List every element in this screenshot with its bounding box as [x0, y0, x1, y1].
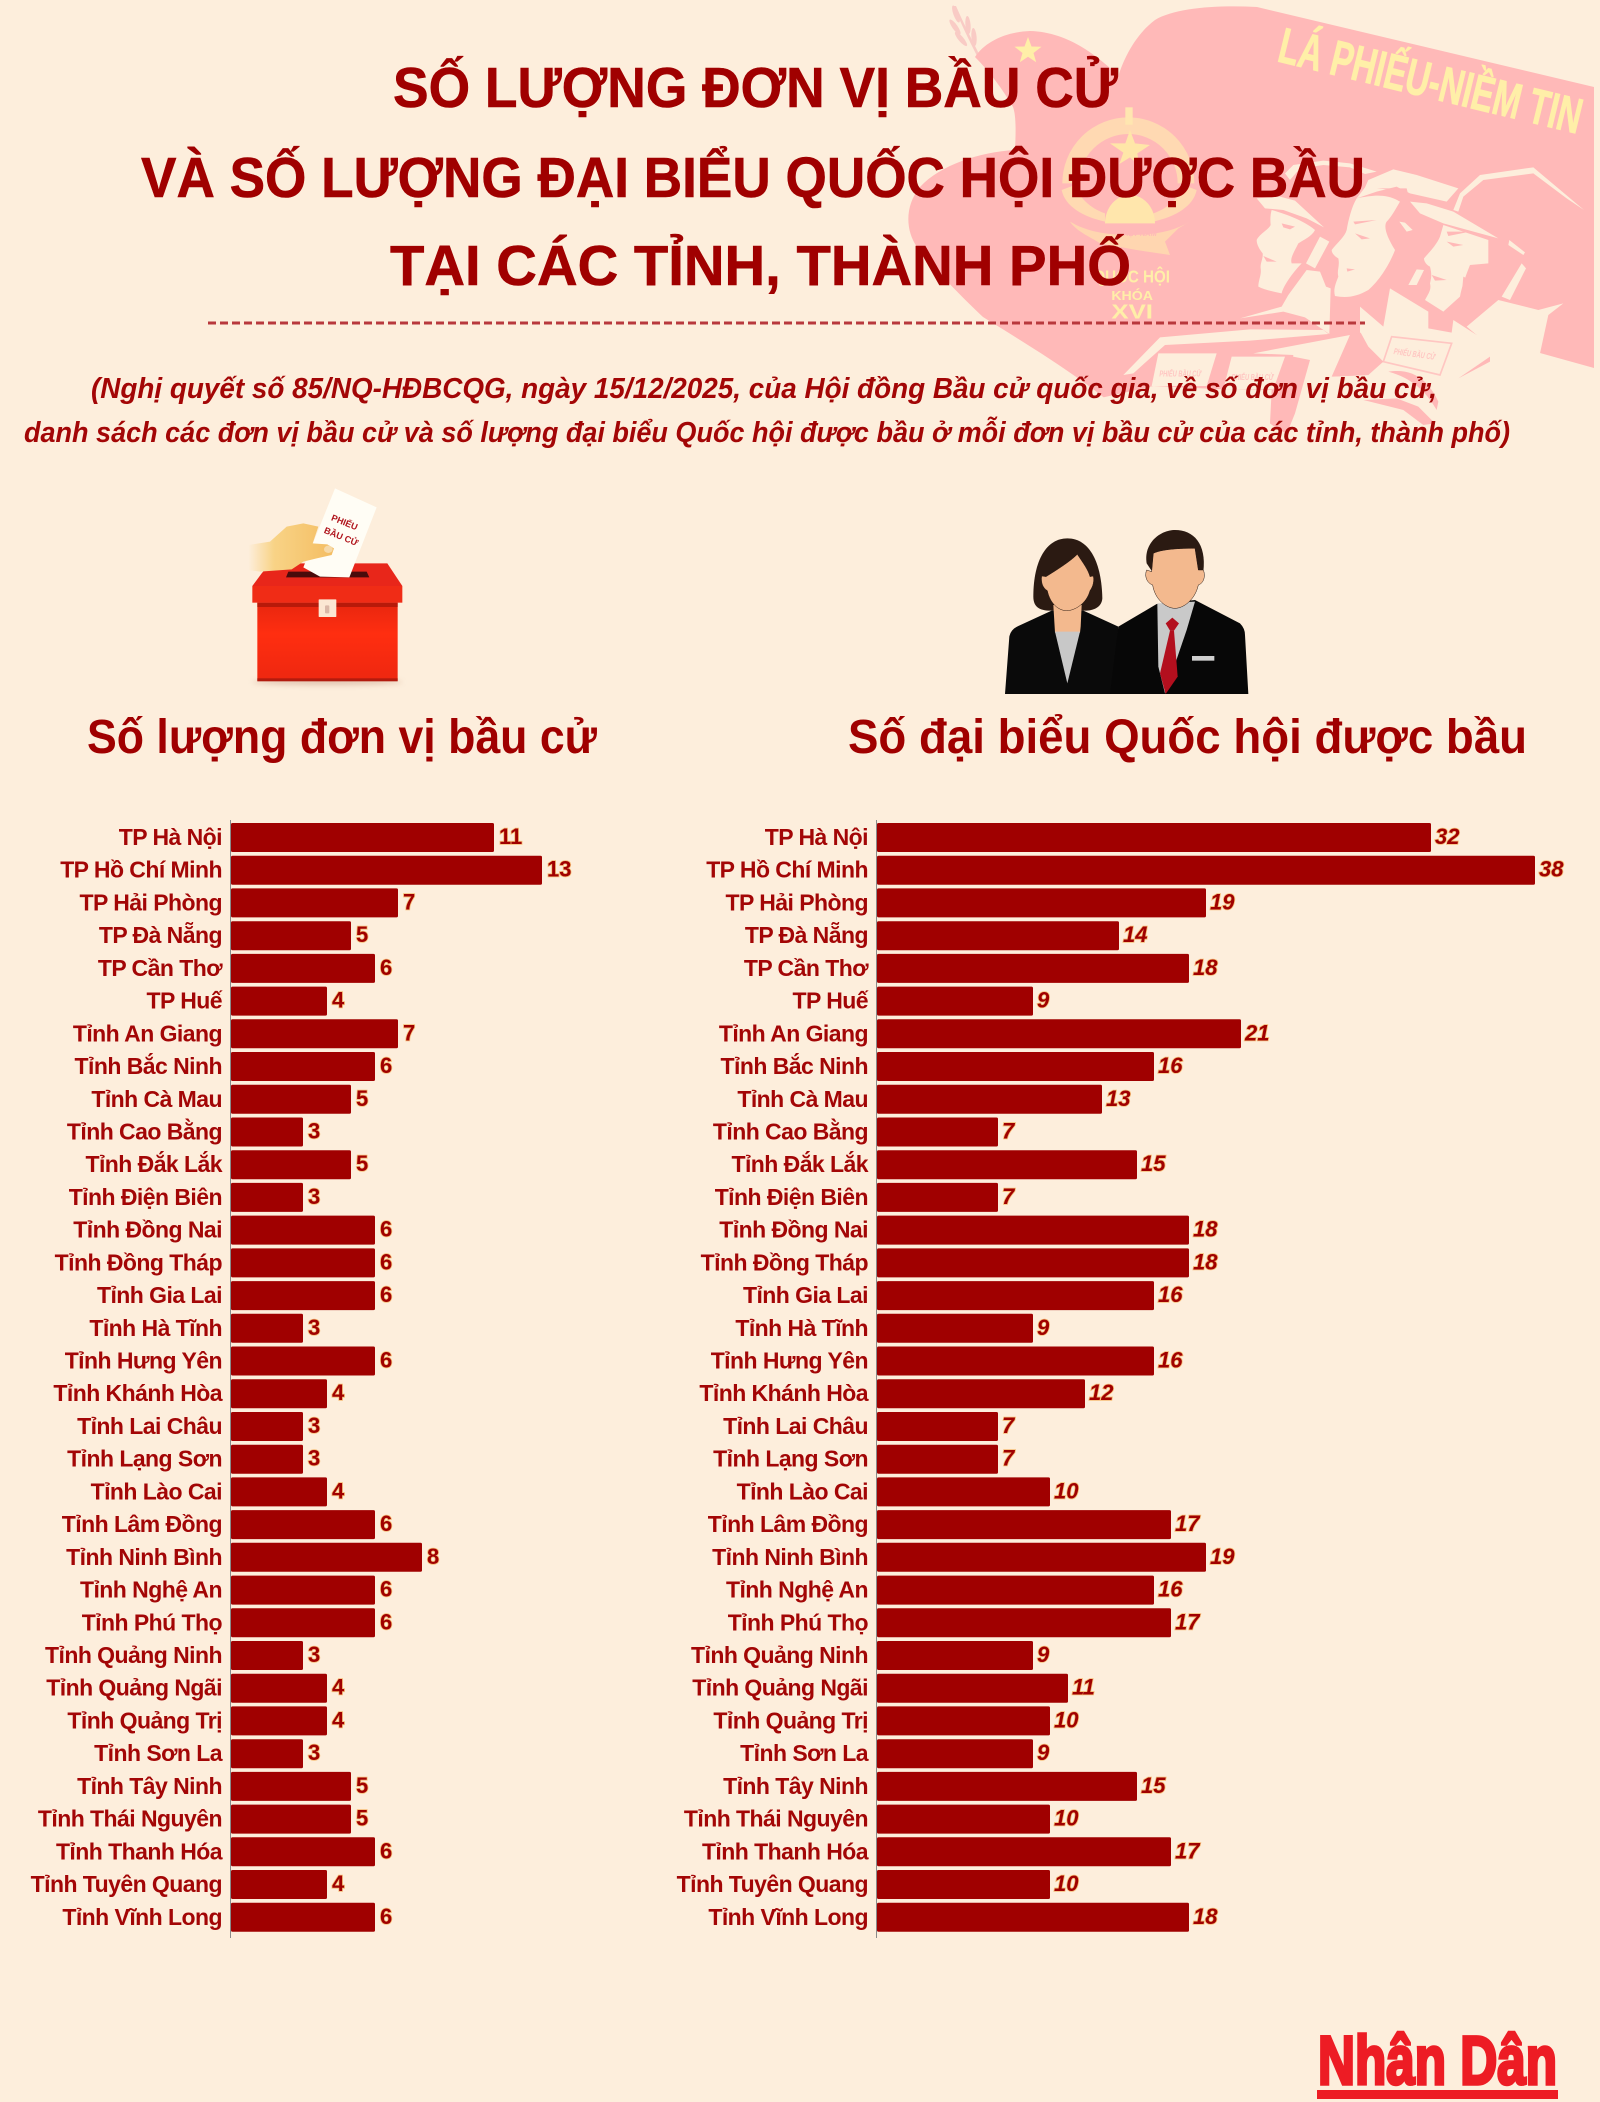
- row Tỉnh Tuyên Quang: Tỉnh Tuyên Quang: [31, 1871, 222, 1897]
- row Tỉnh Đồng Tháp: Tỉnh Đồng Tháp: [55, 1249, 222, 1275]
- row Tỉnh Đồng Tháp: Tỉnh Đồng Tháp: [701, 1249, 868, 1275]
- row Tỉnh Sơn La: Tỉnh Sơn La: [740, 1740, 869, 1766]
- row Tỉnh Nghệ An: Tỉnh Nghệ An: [80, 1577, 222, 1603]
- row Tỉnh Hưng Yên: 16: [1158, 1348, 1183, 1372]
- row Tỉnh Nghệ An: Tỉnh Nghệ An: [726, 1577, 868, 1603]
- row Tỉnh Lạng Sơn: [67, 1445, 320, 1474]
- row Tỉnh Quảng Ngãi: Tỉnh Quảng Ngãi: [46, 1675, 222, 1701]
- row Tỉnh Cà Mau: 13: [1106, 1086, 1130, 1111]
- row Tỉnh Nghệ An: [80, 1576, 392, 1605]
- row Tỉnh Ninh Bình: Tỉnh Ninh Bình: [66, 1544, 222, 1570]
- row Tỉnh Đồng Tháp: [55, 1248, 392, 1277]
- row Tỉnh Lạng Sơn: [713, 1445, 1016, 1474]
- row TP Huế: [792, 987, 1050, 1016]
- national emblem: [1062, 107, 1197, 323]
- row Tỉnh Lạng Sơn: Tỉnh Lạng Sơn: [713, 1446, 868, 1472]
- row TP Hải Phòng: TP Hải Phòng: [80, 889, 222, 915]
- row Tỉnh Đắk Lắk: [85, 1150, 368, 1179]
- row Tỉnh Nghệ An: 6: [380, 1577, 392, 1602]
- row Tỉnh Đồng Tháp: [701, 1248, 1218, 1277]
- row TP Hải Phòng: [726, 888, 1235, 917]
- row Tỉnh Lâm Đồng: 17: [1175, 1511, 1201, 1536]
- raised arms and ballots: PHIẾU BẦU CỬ: [1159, 369, 1202, 379]
- raised arms and ballots: [1103, 329, 1458, 463]
- row Tỉnh Tuyên Quang: [677, 1870, 1079, 1899]
- row Tỉnh Sơn La: [740, 1739, 1050, 1768]
- row TP Cần Thơ: 6: [380, 955, 392, 980]
- row Tỉnh Thanh Hóa: [56, 1837, 392, 1866]
- row Tỉnh Cà Mau: [737, 1085, 1130, 1114]
- row TP Hà Nội: 32: [1435, 824, 1460, 849]
- row Tỉnh Cao Bằng: 3: [308, 1118, 320, 1144]
- row Tỉnh Thanh Hóa: 17: [1175, 1838, 1201, 1863]
- row Tỉnh Bắc Ninh: 6: [380, 1053, 392, 1078]
- row Tỉnh Sơn La: 9: [1037, 1740, 1050, 1765]
- row Tỉnh Lâm Đồng: Tỉnh Lâm Đồng: [708, 1511, 868, 1537]
- voter three: [1410, 167, 1584, 312]
- row Tỉnh Vĩnh Long: 18: [1193, 1904, 1218, 1929]
- row Tỉnh Phú Thọ: Tỉnh Phú Thọ: [728, 1609, 868, 1635]
- title: [141, 55, 1365, 298]
- row Tỉnh Tây Ninh: [77, 1772, 368, 1801]
- wheat sprig: [948, 5, 979, 56]
- row Tỉnh Quảng Ngãi: 4: [332, 1675, 345, 1700]
- voter bodies: [1360, 288, 1593, 387]
- national emblem: QUỐC HỘI: [1093, 267, 1170, 287]
- row Tỉnh Thái Nguyên: [38, 1805, 368, 1834]
- row Tỉnh Cao Bằng: Tỉnh Cao Bằng: [67, 1118, 222, 1144]
- row Tỉnh Thái Nguyên: [684, 1805, 1079, 1834]
- row Tỉnh Quảng Ninh: 9: [1037, 1642, 1050, 1667]
- row Tỉnh An Giang: Tỉnh An Giang: [73, 1020, 222, 1046]
- row Tỉnh Bắc Ninh: 16: [1158, 1053, 1183, 1078]
- row Tỉnh Tây Ninh: 5: [356, 1773, 368, 1798]
- subtitle: (Nghị quyết số 85/NQ-HĐBCQG, ngày 15/12/2025, của Hội đồng Bầu cử quốc gia, về số đơn vị bầu cử,: [91, 373, 1437, 405]
- row Tỉnh Đồng Nai: [73, 1216, 392, 1245]
- row Tỉnh Quảng Ngãi: 11: [1072, 1675, 1095, 1700]
- row Tỉnh Cà Mau: [91, 1085, 368, 1114]
- subtitle: danh sách các đơn vị bầu cử và số lượng đại biểu Quốc hội được bầu ở mỗi đơn vị bầu cử của các tỉnh, thành phố): [24, 415, 1510, 449]
- row Tỉnh Lào Cai: Tỉnh Lào Cai: [737, 1478, 868, 1504]
- row TP Hải Phòng: 7: [403, 889, 415, 914]
- row Tỉnh Hưng Yên: [711, 1346, 1183, 1376]
- row Tỉnh Khánh Hòa: 4: [332, 1380, 345, 1405]
- row Tỉnh Gia Lai: Tỉnh Gia Lai: [743, 1282, 868, 1308]
- row Tỉnh Bắc Ninh: [75, 1052, 392, 1081]
- row Tỉnh Sơn La: [94, 1739, 320, 1768]
- row Tỉnh Quảng Ngãi: [692, 1674, 1095, 1703]
- row Tỉnh Tuyên Quang: 4: [332, 1871, 345, 1896]
- row Tỉnh Phú Thọ: 6: [380, 1609, 392, 1634]
- row TP Đà Nẵng: TP Đà Nẵng: [99, 921, 222, 948]
- row TP Hà Nội: 11: [499, 824, 522, 849]
- row Tỉnh Gia Lai: [97, 1281, 392, 1310]
- row Tỉnh Điện Biên: 3: [308, 1184, 320, 1209]
- row TP Hải Phòng: [80, 888, 415, 917]
- row Tỉnh Ninh Bình: 19: [1210, 1544, 1235, 1569]
- voter two: [1332, 169, 1458, 297]
- row Tỉnh Gia Lai: 6: [380, 1282, 392, 1307]
- row Tỉnh Đắk Lắk: Tỉnh Đắk Lắk: [85, 1150, 223, 1177]
- row TP Huế: TP Huế: [792, 988, 869, 1014]
- row Tỉnh Đồng Nai: Tỉnh Đồng Nai: [719, 1217, 868, 1243]
- row Tỉnh Lai Châu: 7: [1002, 1413, 1016, 1438]
- row Tỉnh Tuyên Quang: 10: [1054, 1871, 1079, 1896]
- row Tỉnh Nghệ An: [726, 1576, 1183, 1605]
- row Tỉnh Quảng Trị: [67, 1706, 345, 1735]
- row TP Đà Nẵng: TP Đà Nẵng: [745, 921, 868, 948]
- row Tỉnh Tây Ninh: [723, 1772, 1166, 1801]
- row Tỉnh Đắk Lắk: 15: [1141, 1151, 1166, 1176]
- row Tỉnh Bắc Ninh: Tỉnh Bắc Ninh: [721, 1052, 868, 1079]
- row Tỉnh Lạng Sơn: 3: [308, 1446, 320, 1471]
- row TP Đà Nẵng: [745, 921, 1147, 950]
- row TP Hồ Chí Minh: 38: [1539, 857, 1564, 882]
- row Tỉnh Hưng Yên: [65, 1346, 392, 1376]
- row Tỉnh Hưng Yên: 6: [380, 1348, 392, 1372]
- row Tỉnh Gia Lai: [743, 1281, 1183, 1310]
- row Tỉnh Bắc Ninh: [721, 1052, 1183, 1081]
- row Tỉnh Bắc Ninh: Tỉnh Bắc Ninh: [75, 1052, 222, 1079]
- row TP Hà Nội: [765, 823, 1460, 852]
- row Tỉnh Hà Tĩnh: Tỉnh Hà Tĩnh: [735, 1315, 868, 1341]
- pink hand stripes: [1333, 333, 1490, 425]
- row Tỉnh Lào Cai: Tỉnh Lào Cai: [91, 1478, 222, 1504]
- row TP Hồ Chí Minh: TP Hồ Chí Minh: [60, 857, 222, 883]
- row Tỉnh Tây Ninh: 15: [1141, 1773, 1166, 1798]
- row Tỉnh Điện Biên: Tỉnh Điện Biên: [715, 1184, 868, 1210]
- row Tỉnh Phú Thọ: Tỉnh Phú Thọ: [82, 1609, 222, 1635]
- row TP Hà Nội: TP Hà Nội: [765, 824, 868, 850]
- row Tỉnh Quảng Trị: Tỉnh Quảng Trị: [713, 1707, 868, 1733]
- row Tỉnh Lâm Đồng: 6: [380, 1511, 392, 1536]
- banner illustration: dove, flag and three voters: [908, 5, 1594, 463]
- icon: ballot box: [248, 488, 402, 685]
- row TP Cần Thơ: TP Cần Thơ: [744, 955, 869, 981]
- row TP Hà Nội: TP Hà Nội: [119, 824, 222, 850]
- row Tỉnh Tuyên Quang: Tỉnh Tuyên Quang: [677, 1871, 868, 1897]
- row Tỉnh Quảng Ninh: Tỉnh Quảng Ninh: [45, 1642, 222, 1668]
- voters: [1240, 161, 1593, 387]
- row Tỉnh Quảng Trị: 4: [332, 1707, 345, 1732]
- row TP Hải Phòng: TP Hải Phòng: [726, 889, 868, 915]
- row Tỉnh Thanh Hóa: Tỉnh Thanh Hóa: [702, 1838, 869, 1864]
- row Tỉnh Đồng Nai: [719, 1216, 1218, 1245]
- row Tỉnh Thái Nguyên: 10: [1054, 1806, 1079, 1831]
- row Tỉnh Quảng Ninh: Tỉnh Quảng Ninh: [691, 1642, 868, 1668]
- row Tỉnh Nghệ An: 16: [1158, 1577, 1183, 1602]
- row Tỉnh Quảng Ngãi: Tỉnh Quảng Ngãi: [692, 1675, 868, 1701]
- row Tỉnh Lai Châu: [723, 1412, 1016, 1441]
- row Tỉnh Đắk Lắk: Tỉnh Đắk Lắk: [731, 1150, 869, 1177]
- national emblem: XVI: [1111, 300, 1153, 323]
- national emblem: KHÓA: [1111, 288, 1153, 303]
- row Tỉnh Tây Ninh: Tỉnh Tây Ninh: [723, 1773, 868, 1799]
- row TP Huế: 4: [332, 988, 345, 1013]
- row Tỉnh Sơn La: 3: [308, 1740, 320, 1765]
- row Tỉnh Ninh Bình: Tỉnh Ninh Bình: [712, 1544, 868, 1570]
- chest ballot: [1383, 337, 1452, 375]
- dove and flag shape: [908, 6, 1594, 436]
- row Tỉnh Vĩnh Long: 6: [380, 1904, 392, 1929]
- row Tỉnh Quảng Trị: 10: [1054, 1707, 1079, 1732]
- row TP Cần Thơ: [744, 954, 1218, 983]
- row Tỉnh Vĩnh Long: [62, 1903, 392, 1932]
- row Tỉnh Quảng Ninh: [45, 1641, 320, 1670]
- row TP Huế: TP Huế: [146, 988, 223, 1014]
- row Tỉnh Hưng Yên: Tỉnh Hưng Yên: [65, 1348, 222, 1374]
- icon: ballot box: PHIẾU: [330, 513, 359, 532]
- row Tỉnh Lai Châu: [77, 1412, 320, 1441]
- star on dove: [1014, 37, 1042, 62]
- row Tỉnh Khánh Hòa: [53, 1379, 345, 1408]
- row Tỉnh Đắk Lắk: 5: [356, 1151, 368, 1176]
- row Tỉnh An Giang: 21: [1244, 1020, 1269, 1045]
- row Tỉnh Hà Tĩnh: [735, 1314, 1050, 1343]
- row Tỉnh Đồng Nai: 6: [380, 1217, 392, 1242]
- row Tỉnh Cà Mau: Tỉnh Cà Mau: [737, 1086, 868, 1112]
- row TP Đà Nẵng: 5: [356, 922, 368, 947]
- row Tỉnh Khánh Hòa: Tỉnh Khánh Hòa: [699, 1380, 869, 1406]
- title: VÀ SỐ LƯỢNG ĐẠI BIỂU QUỐC HỘI ĐƯỢC BẦU: [141, 145, 1365, 210]
- row TP Cần Thơ: TP Cần Thơ: [98, 955, 223, 981]
- row Tỉnh Quảng Ngãi: [46, 1674, 345, 1703]
- row Tỉnh Lai Châu: 3: [308, 1413, 320, 1438]
- row Tỉnh Phú Thọ: [728, 1608, 1201, 1637]
- row Tỉnh Thanh Hóa: 6: [380, 1838, 392, 1863]
- row Tỉnh Quảng Ninh: [691, 1641, 1050, 1670]
- row Tỉnh Quảng Trị: Tỉnh Quảng Trị: [67, 1707, 222, 1733]
- row Tỉnh Cao Bằng: [67, 1118, 320, 1146]
- row Tỉnh Điện Biên: [715, 1183, 1016, 1212]
- row Tỉnh Khánh Hòa: Tỉnh Khánh Hòa: [53, 1380, 223, 1406]
- row Tỉnh Đồng Nai: 18: [1193, 1217, 1218, 1242]
- row Tỉnh Lâm Đồng: [708, 1510, 1201, 1539]
- row TP Huế: [146, 987, 345, 1016]
- heading: số lượng đơn vị bầu cử: Số lượng đơn vị bầu cử: [87, 711, 597, 764]
- row Tỉnh Quảng Ninh: 3: [308, 1642, 320, 1667]
- raised arms and ballots: PHIẾU BẦU CỬ: [1232, 372, 1274, 382]
- row Tỉnh Lào Cai: 4: [332, 1478, 345, 1503]
- title: SỐ LƯỢNG ĐƠN VỊ BẦU CỬ: [393, 55, 1119, 120]
- row Tỉnh Khánh Hòa: 12: [1089, 1380, 1114, 1405]
- icon: ballot box: BẦU CỬ: [323, 524, 360, 548]
- row Tỉnh Ninh Bình: [66, 1543, 439, 1572]
- row Tỉnh Hưng Yên: Tỉnh Hưng Yên: [711, 1348, 868, 1374]
- row TP Huế: 9: [1037, 988, 1050, 1013]
- row Tỉnh Thanh Hóa: Tỉnh Thanh Hóa: [56, 1838, 223, 1864]
- row Tỉnh Điện Biên: Tỉnh Điện Biên: [69, 1184, 222, 1210]
- row Tỉnh Đồng Tháp: 6: [380, 1249, 392, 1274]
- title: TẠI CÁC TỈNH, THÀNH PHỐ: [390, 233, 1131, 298]
- row Tỉnh Vĩnh Long: [708, 1903, 1218, 1932]
- voters: PHIẾU BẦU CỬ: [1393, 345, 1437, 362]
- row Tỉnh Khánh Hòa: [699, 1379, 1114, 1408]
- row Tỉnh Lào Cai: [737, 1477, 1079, 1506]
- row Tỉnh Hà Tĩnh: 3: [308, 1315, 320, 1340]
- row Tỉnh Sơn La: Tỉnh Sơn La: [94, 1740, 223, 1766]
- row Tỉnh Cao Bằng: [713, 1118, 1016, 1146]
- row Tỉnh Thanh Hóa: [702, 1837, 1201, 1866]
- row Tỉnh Lâm Đồng: Tỉnh Lâm Đồng: [62, 1511, 222, 1537]
- row TP Hà Nội: [119, 823, 522, 852]
- row Tỉnh Lai Châu: Tỉnh Lai Châu: [723, 1413, 868, 1439]
- row Tỉnh Đắk Lắk: [731, 1150, 1166, 1179]
- row Tỉnh Lào Cai: [91, 1477, 345, 1506]
- row Tỉnh Điện Biên: [69, 1183, 320, 1212]
- row Tỉnh Lạng Sơn: Tỉnh Lạng Sơn: [67, 1446, 222, 1472]
- row Tỉnh Tây Ninh: Tỉnh Tây Ninh: [77, 1773, 222, 1799]
- bar chart: số lượng đơn vị bầu cử: [31, 820, 571, 1938]
- row Tỉnh An Giang: 7: [403, 1020, 415, 1045]
- row Tỉnh An Giang: [719, 1019, 1269, 1048]
- icon: woman and man delegates: [1005, 530, 1248, 694]
- row Tỉnh An Giang: [73, 1019, 415, 1048]
- row Tỉnh Điện Biên: 7: [1002, 1184, 1016, 1209]
- row Tỉnh Thái Nguyên: Tỉnh Thái Nguyên: [684, 1806, 868, 1832]
- row Tỉnh Phú Thọ: 17: [1175, 1609, 1201, 1634]
- row Tỉnh Hà Tĩnh: Tỉnh Hà Tĩnh: [89, 1315, 222, 1341]
- row TP Hồ Chí Minh: [60, 856, 571, 885]
- row Tỉnh Cà Mau: 5: [356, 1086, 368, 1111]
- row Tỉnh Cao Bằng: 7: [1002, 1118, 1016, 1144]
- row Tỉnh Lâm Đồng: [62, 1510, 392, 1539]
- row Tỉnh Ninh Bình: 8: [427, 1544, 439, 1569]
- row Tỉnh Phú Thọ: [82, 1608, 392, 1637]
- row Tỉnh Gia Lai: 16: [1158, 1282, 1183, 1307]
- row Tỉnh Đồng Nai: Tỉnh Đồng Nai: [73, 1217, 222, 1243]
- row TP Hồ Chí Minh: 13: [547, 857, 571, 882]
- row TP Cần Thơ: [98, 954, 392, 983]
- row TP Hồ Chí Minh: [706, 856, 1564, 885]
- row Tỉnh Ninh Bình: [712, 1543, 1235, 1572]
- row TP Đà Nẵng: [99, 921, 368, 950]
- row Tỉnh Vĩnh Long: Tỉnh Vĩnh Long: [708, 1904, 868, 1930]
- voter one: [1240, 161, 1377, 334]
- row Tỉnh Quảng Trị: [713, 1706, 1079, 1735]
- row Tỉnh Hà Tĩnh: [89, 1314, 320, 1343]
- row Tỉnh Lạng Sơn: 7: [1002, 1446, 1016, 1471]
- subtitle: [24, 373, 1510, 449]
- row TP Hải Phòng: 19: [1210, 889, 1235, 914]
- row TP Hồ Chí Minh: TP Hồ Chí Minh: [706, 857, 868, 883]
- row Tỉnh Lào Cai: 10: [1054, 1478, 1079, 1503]
- row Tỉnh Thái Nguyên: 5: [356, 1806, 368, 1831]
- row Tỉnh Tuyên Quang: [31, 1870, 345, 1899]
- heading: số đại biểu quốc hội được bầu: Số đại biểu Quốc hội được bầu: [848, 711, 1527, 764]
- row TP Cần Thơ: 18: [1193, 955, 1218, 980]
- row Tỉnh Cà Mau: Tỉnh Cà Mau: [91, 1086, 222, 1112]
- row Tỉnh Gia Lai: Tỉnh Gia Lai: [97, 1282, 222, 1308]
- row Tỉnh Thái Nguyên: Tỉnh Thái Nguyên: [38, 1806, 222, 1832]
- row Tỉnh An Giang: Tỉnh An Giang: [719, 1020, 868, 1046]
- row Tỉnh Vĩnh Long: Tỉnh Vĩnh Long: [62, 1904, 222, 1930]
- row Tỉnh Cao Bằng: Tỉnh Cao Bằng: [713, 1118, 868, 1144]
- bar chart: số đại biểu quốc hội được bầu: [677, 820, 1564, 1938]
- national emblem: VIỆT NAM: [1122, 229, 1158, 238]
- row Tỉnh Đồng Tháp: 18: [1193, 1249, 1218, 1274]
- row Tỉnh Lai Châu: Tỉnh Lai Châu: [77, 1413, 222, 1439]
- row Tỉnh Hà Tĩnh: 9: [1037, 1315, 1050, 1340]
- row TP Đà Nẵng: 14: [1123, 922, 1147, 947]
